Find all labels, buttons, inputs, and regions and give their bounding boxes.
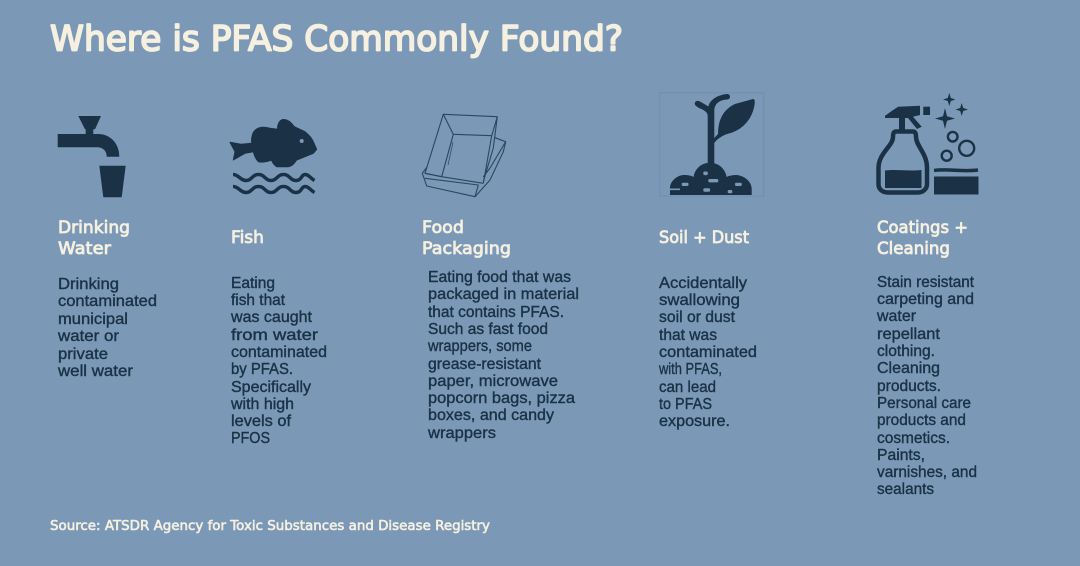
- text: fish: [230, 275, 327, 447]
- text: food packaging: boxes, and candy: [428, 407, 554, 424]
- heading: coatings and cleaning: [877, 218, 968, 259]
- heading: drinking water: Water: [58, 239, 111, 259]
- panel: soil and dust: [658, 93, 764, 430]
- heading: fish: Fish: [231, 228, 264, 248]
- text: fish: contaminated: [231, 344, 327, 361]
- heading: coatings and cleaning: Cleaning: [877, 239, 950, 259]
- text: fish: with high: [230, 396, 294, 413]
- text: coatings and cleaning: water: [876, 308, 917, 325]
- text: coatings and cleaning: clothing.: [877, 343, 935, 360]
- text: soil and dust: contaminated: [659, 344, 757, 361]
- text: soil and dust: swallowing: [659, 292, 740, 309]
- panel: food packaging: [422, 114, 579, 442]
- text: coatings and cleaning: products and: [877, 412, 966, 429]
- text: drinking water: [57, 276, 157, 380]
- text: coatings and cleaning: repellant: [877, 326, 941, 343]
- text: coatings and cleaning: products.: [877, 378, 941, 395]
- panel: drinking water: [57, 116, 157, 380]
- text: soil and dust: exposure.: [659, 413, 730, 430]
- icon: fish over water: [230, 119, 317, 192]
- text: fish: Eating: [231, 275, 275, 292]
- text: food packaging: popcorn bags, pizza: [428, 390, 575, 407]
- text: food packaging: packaged in material: [428, 286, 579, 303]
- text: coatings and cleaning: sealants: [877, 481, 934, 498]
- icon: seedling in soil: [660, 93, 764, 196]
- heading: soil and dust: Soil + Dust: [659, 228, 749, 248]
- text: soil and dust: [658, 275, 757, 430]
- text: food packaging: wrappers: [427, 425, 496, 442]
- heading: coatings and cleaning: Coatings +: [877, 218, 968, 238]
- text: soil and dust: can lead: [659, 379, 716, 396]
- heading: drinking water: Drinking: [58, 218, 130, 238]
- text: fish: PFOS: [231, 430, 270, 447]
- text: fish: levels of: [231, 413, 292, 430]
- text: drinking water: private: [58, 346, 108, 363]
- text: coatings and cleaning: Paints,: [877, 447, 925, 464]
- heading: food packaging: Food: [422, 218, 464, 238]
- text: food packaging: wrappers, some: [427, 338, 532, 355]
- panel: fish: [230, 119, 327, 447]
- text: coatings and cleaning: Cleaning: [877, 360, 940, 377]
- text: coatings and cleaning: Personal care: [877, 395, 971, 412]
- text: drinking water: municipal: [58, 311, 128, 328]
- text: food packaging: paper, microwave: [428, 373, 558, 390]
- text: coatings and cleaning: Stain resistant: [877, 274, 975, 291]
- source note: Source: ATSDR Agency for Toxic Substances and Disease Registry: [50, 518, 490, 534]
- text: soil and dust: Accidentally: [659, 275, 747, 292]
- text: soil and dust: soil or dust: [659, 309, 736, 326]
- text: fish: fish that: [231, 292, 286, 309]
- text: coatings and cleaning: cosmetics.: [877, 430, 950, 447]
- text: fish: from water: [231, 327, 319, 344]
- heading: drinking water: [58, 218, 130, 259]
- text: food packaging: Eating food that was: [428, 269, 571, 286]
- heading: food packaging: Packaging: [422, 239, 511, 259]
- text: coatings and cleaning: [876, 274, 977, 498]
- text: soil and dust: that was: [659, 327, 717, 344]
- panel: coatings and cleaning: [876, 93, 978, 498]
- text: food packaging: [427, 269, 579, 442]
- text: drinking water: well water: [57, 363, 134, 380]
- text: food packaging: grease-resistant: [428, 356, 542, 373]
- text: drinking water: contaminated: [58, 293, 157, 310]
- text: food packaging: Such as fast food: [428, 321, 548, 338]
- text: coatings and cleaning: varnishes, and: [877, 464, 977, 481]
- icon: spray bottle, bubbles and sponge: [878, 93, 978, 194]
- text: soil and dust: with PFAS,: [658, 361, 722, 378]
- text: food packaging: that contains PFAS.: [428, 304, 564, 321]
- icon: faucet and cup: [58, 116, 126, 197]
- text: drinking water: water or: [57, 328, 120, 345]
- icon: food box: [422, 114, 506, 197]
- text: fish: was caught: [230, 309, 313, 326]
- text: soil and dust: to PFAS: [659, 396, 712, 413]
- text: fish: Specifically: [231, 379, 311, 396]
- heading: food packaging: [422, 218, 511, 259]
- text: fish: by PFAS.: [231, 361, 293, 378]
- text: drinking water: Drinking: [58, 276, 119, 293]
- title: Where is PFAS Commonly Found?: [50, 20, 623, 60]
- text: coatings and cleaning: carpeting and: [877, 291, 974, 308]
